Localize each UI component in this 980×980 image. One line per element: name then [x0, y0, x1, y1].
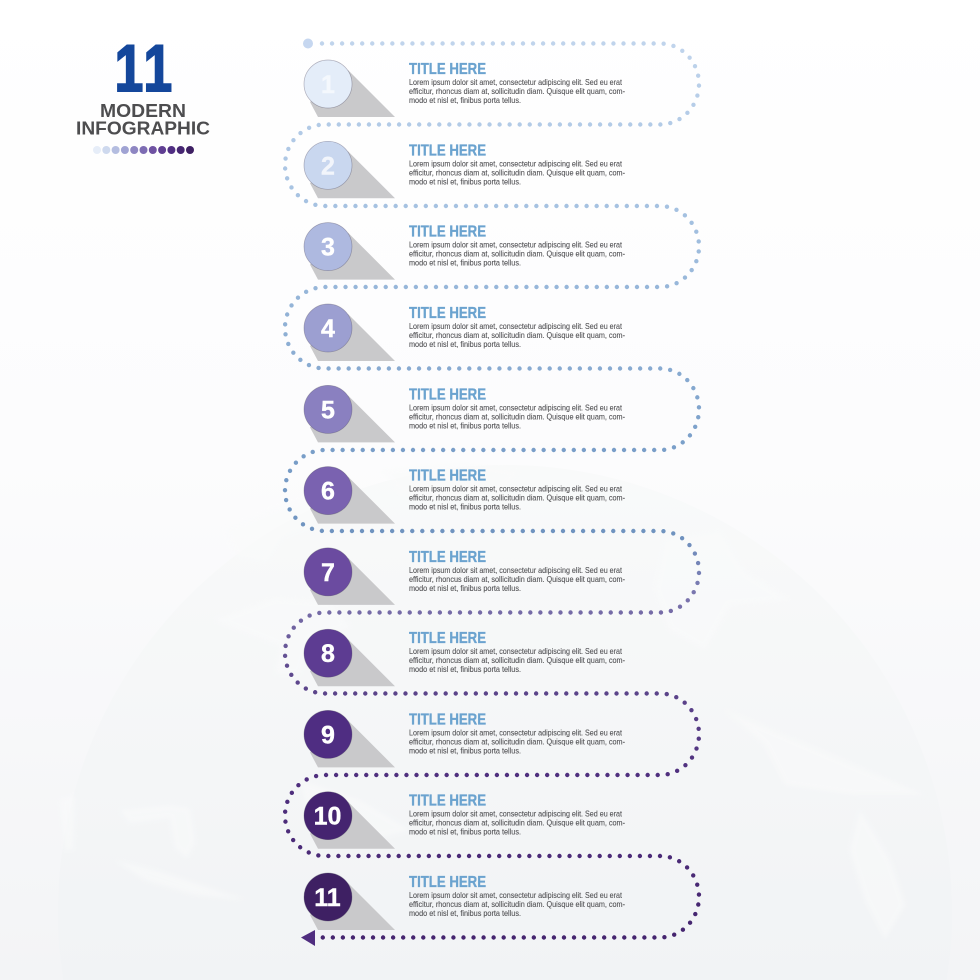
step 2	[304, 141, 625, 198]
step text: Lorem ipsum dolor sit amet, consectetur adipiscing elit. Sed eu erat	[409, 810, 623, 819]
step text: efficitur, rhoncus diam at, sollicitudin diam. Quisque elit quam, com-	[409, 87, 625, 96]
step title: TITLE HERE	[409, 711, 486, 728]
long shadow	[310, 883, 395, 930]
number: 1	[321, 71, 335, 99]
long shadow	[310, 233, 395, 280]
step text: Lorem ipsum dolor sit amet, consectetur adipiscing elit. Sed eu erat	[409, 485, 623, 494]
long shadow	[310, 720, 395, 767]
number: 7	[321, 559, 335, 587]
step 6	[304, 467, 625, 524]
number circle	[304, 467, 352, 515]
step text: modo et nisl et, finibus porta tellus.	[409, 584, 521, 593]
long shadow	[310, 477, 395, 524]
step text: efficitur, rhoncus diam at, sollicitudin diam. Quisque elit quam, com-	[409, 412, 625, 421]
number: 5	[321, 396, 335, 424]
step 3	[304, 223, 625, 280]
step text: modo et nisl et, finibus porta tellus.	[409, 909, 521, 918]
step 8	[304, 629, 625, 686]
number circle	[304, 304, 352, 352]
long shadow	[310, 70, 395, 117]
step title: TITLE HERE	[409, 224, 486, 241]
step text: modo et nisl et, finibus porta tellus.	[409, 503, 521, 512]
step text: Lorem ipsum dolor sit amet, consectetur adipiscing elit. Sed eu erat	[409, 241, 623, 250]
step text: efficitur, rhoncus diam at, sollicitudin diam. Quisque elit quam, com-	[409, 331, 625, 340]
long shadow	[310, 639, 395, 686]
step title: TITLE HERE	[409, 630, 486, 647]
number: 10	[314, 803, 341, 831]
number: 11	[314, 884, 341, 912]
number circle	[304, 710, 352, 758]
step title: TITLE HERE	[409, 549, 486, 566]
step title: TITLE HERE	[409, 468, 486, 485]
step title: TITLE HERE	[409, 386, 486, 403]
step text: efficitur, rhoncus diam at, sollicitudin diam. Quisque elit quam, com-	[409, 656, 625, 665]
step text: Lorem ipsum dolor sit amet, consectetur adipiscing elit. Sed eu erat	[409, 647, 623, 656]
number circle	[304, 60, 352, 108]
step 5	[304, 385, 625, 442]
step title: TITLE HERE	[409, 142, 486, 159]
step text: modo et nisl et, finibus porta tellus.	[409, 665, 521, 674]
long shadow	[310, 314, 395, 361]
step text: efficitur, rhoncus diam at, sollicitudin diam. Quisque elit quam, com-	[409, 168, 625, 177]
step text: Lorem ipsum dolor sit amet, consectetur adipiscing elit. Sed eu erat	[409, 159, 623, 168]
step text: modo et nisl et, finibus porta tellus.	[409, 421, 521, 430]
step text: modo et nisl et, finibus porta tellus.	[409, 177, 521, 186]
step 10	[304, 792, 625, 849]
step text: modo et nisl et, finibus porta tellus.	[409, 259, 521, 268]
step text: modo et nisl et, finibus porta tellus.	[409, 340, 521, 349]
path end arrow	[301, 930, 315, 946]
number circle	[304, 548, 352, 596]
step text: modo et nisl et, finibus porta tellus.	[409, 96, 521, 105]
number: 6	[321, 478, 335, 506]
number: 2	[321, 152, 335, 180]
step title: TITLE HERE	[409, 61, 486, 78]
colour progress dots	[93, 146, 194, 154]
step text: efficitur, rhoncus diam at, sollicitudin diam. Quisque elit quam, com-	[409, 494, 625, 503]
number circle	[304, 141, 352, 189]
number circle	[304, 223, 352, 271]
step title: TITLE HERE	[409, 305, 486, 322]
long shadow	[310, 802, 395, 849]
number: 8	[321, 640, 335, 668]
long shadow	[310, 151, 395, 198]
step text: efficitur, rhoncus diam at, sollicitudin diam. Quisque elit quam, com-	[409, 575, 625, 584]
step text: efficitur, rhoncus diam at, sollicitudin diam. Quisque elit quam, com-	[409, 900, 625, 909]
heading line 1: MODERN	[100, 100, 186, 121]
step text: Lorem ipsum dolor sit amet, consectetur adipiscing elit. Sed eu erat	[409, 728, 623, 737]
step text: modo et nisl et, finibus porta tellus.	[409, 828, 521, 837]
step 9	[304, 710, 625, 767]
step text: Lorem ipsum dolor sit amet, consectetur adipiscing elit. Sed eu erat	[409, 322, 623, 331]
step 1	[304, 60, 625, 117]
world globe backdrop	[58, 462, 952, 980]
step title: TITLE HERE	[409, 874, 486, 891]
number: 9	[321, 721, 335, 749]
heading line 2: INFOGRAPHIC	[76, 118, 210, 138]
long shadow	[310, 395, 395, 442]
number: 3	[321, 234, 335, 262]
step title: TITLE HERE	[409, 793, 486, 810]
step 7	[304, 548, 625, 605]
path start dot	[303, 38, 313, 48]
step 4	[304, 304, 625, 361]
number circle	[304, 385, 352, 433]
step text: efficitur, rhoncus diam at, sollicitudin diam. Quisque elit quam, com-	[409, 250, 625, 259]
step text: Lorem ipsum dolor sit amet, consectetur adipiscing elit. Sed eu erat	[409, 566, 623, 575]
step text: Lorem ipsum dolor sit amet, consectetur adipiscing elit. Sed eu erat	[409, 403, 623, 412]
step text: efficitur, rhoncus diam at, sollicitudin diam. Quisque elit quam, com-	[409, 737, 625, 746]
number: 4	[321, 315, 335, 343]
step 11	[304, 873, 625, 930]
big number 11: 11	[115, 31, 172, 105]
step text: modo et nisl et, finibus porta tellus.	[409, 746, 521, 755]
step text: Lorem ipsum dolor sit amet, consectetur adipiscing elit. Sed eu erat	[409, 891, 623, 900]
dotted winding path	[285, 44, 699, 938]
title block	[76, 31, 210, 154]
number circle	[304, 629, 352, 677]
number circle	[304, 792, 352, 840]
step text: efficitur, rhoncus diam at, sollicitudin diam. Quisque elit quam, com-	[409, 819, 625, 828]
number circle	[304, 873, 352, 921]
step text: Lorem ipsum dolor sit amet, consectetur adipiscing elit. Sed eu erat	[409, 78, 623, 87]
long shadow	[310, 558, 395, 605]
